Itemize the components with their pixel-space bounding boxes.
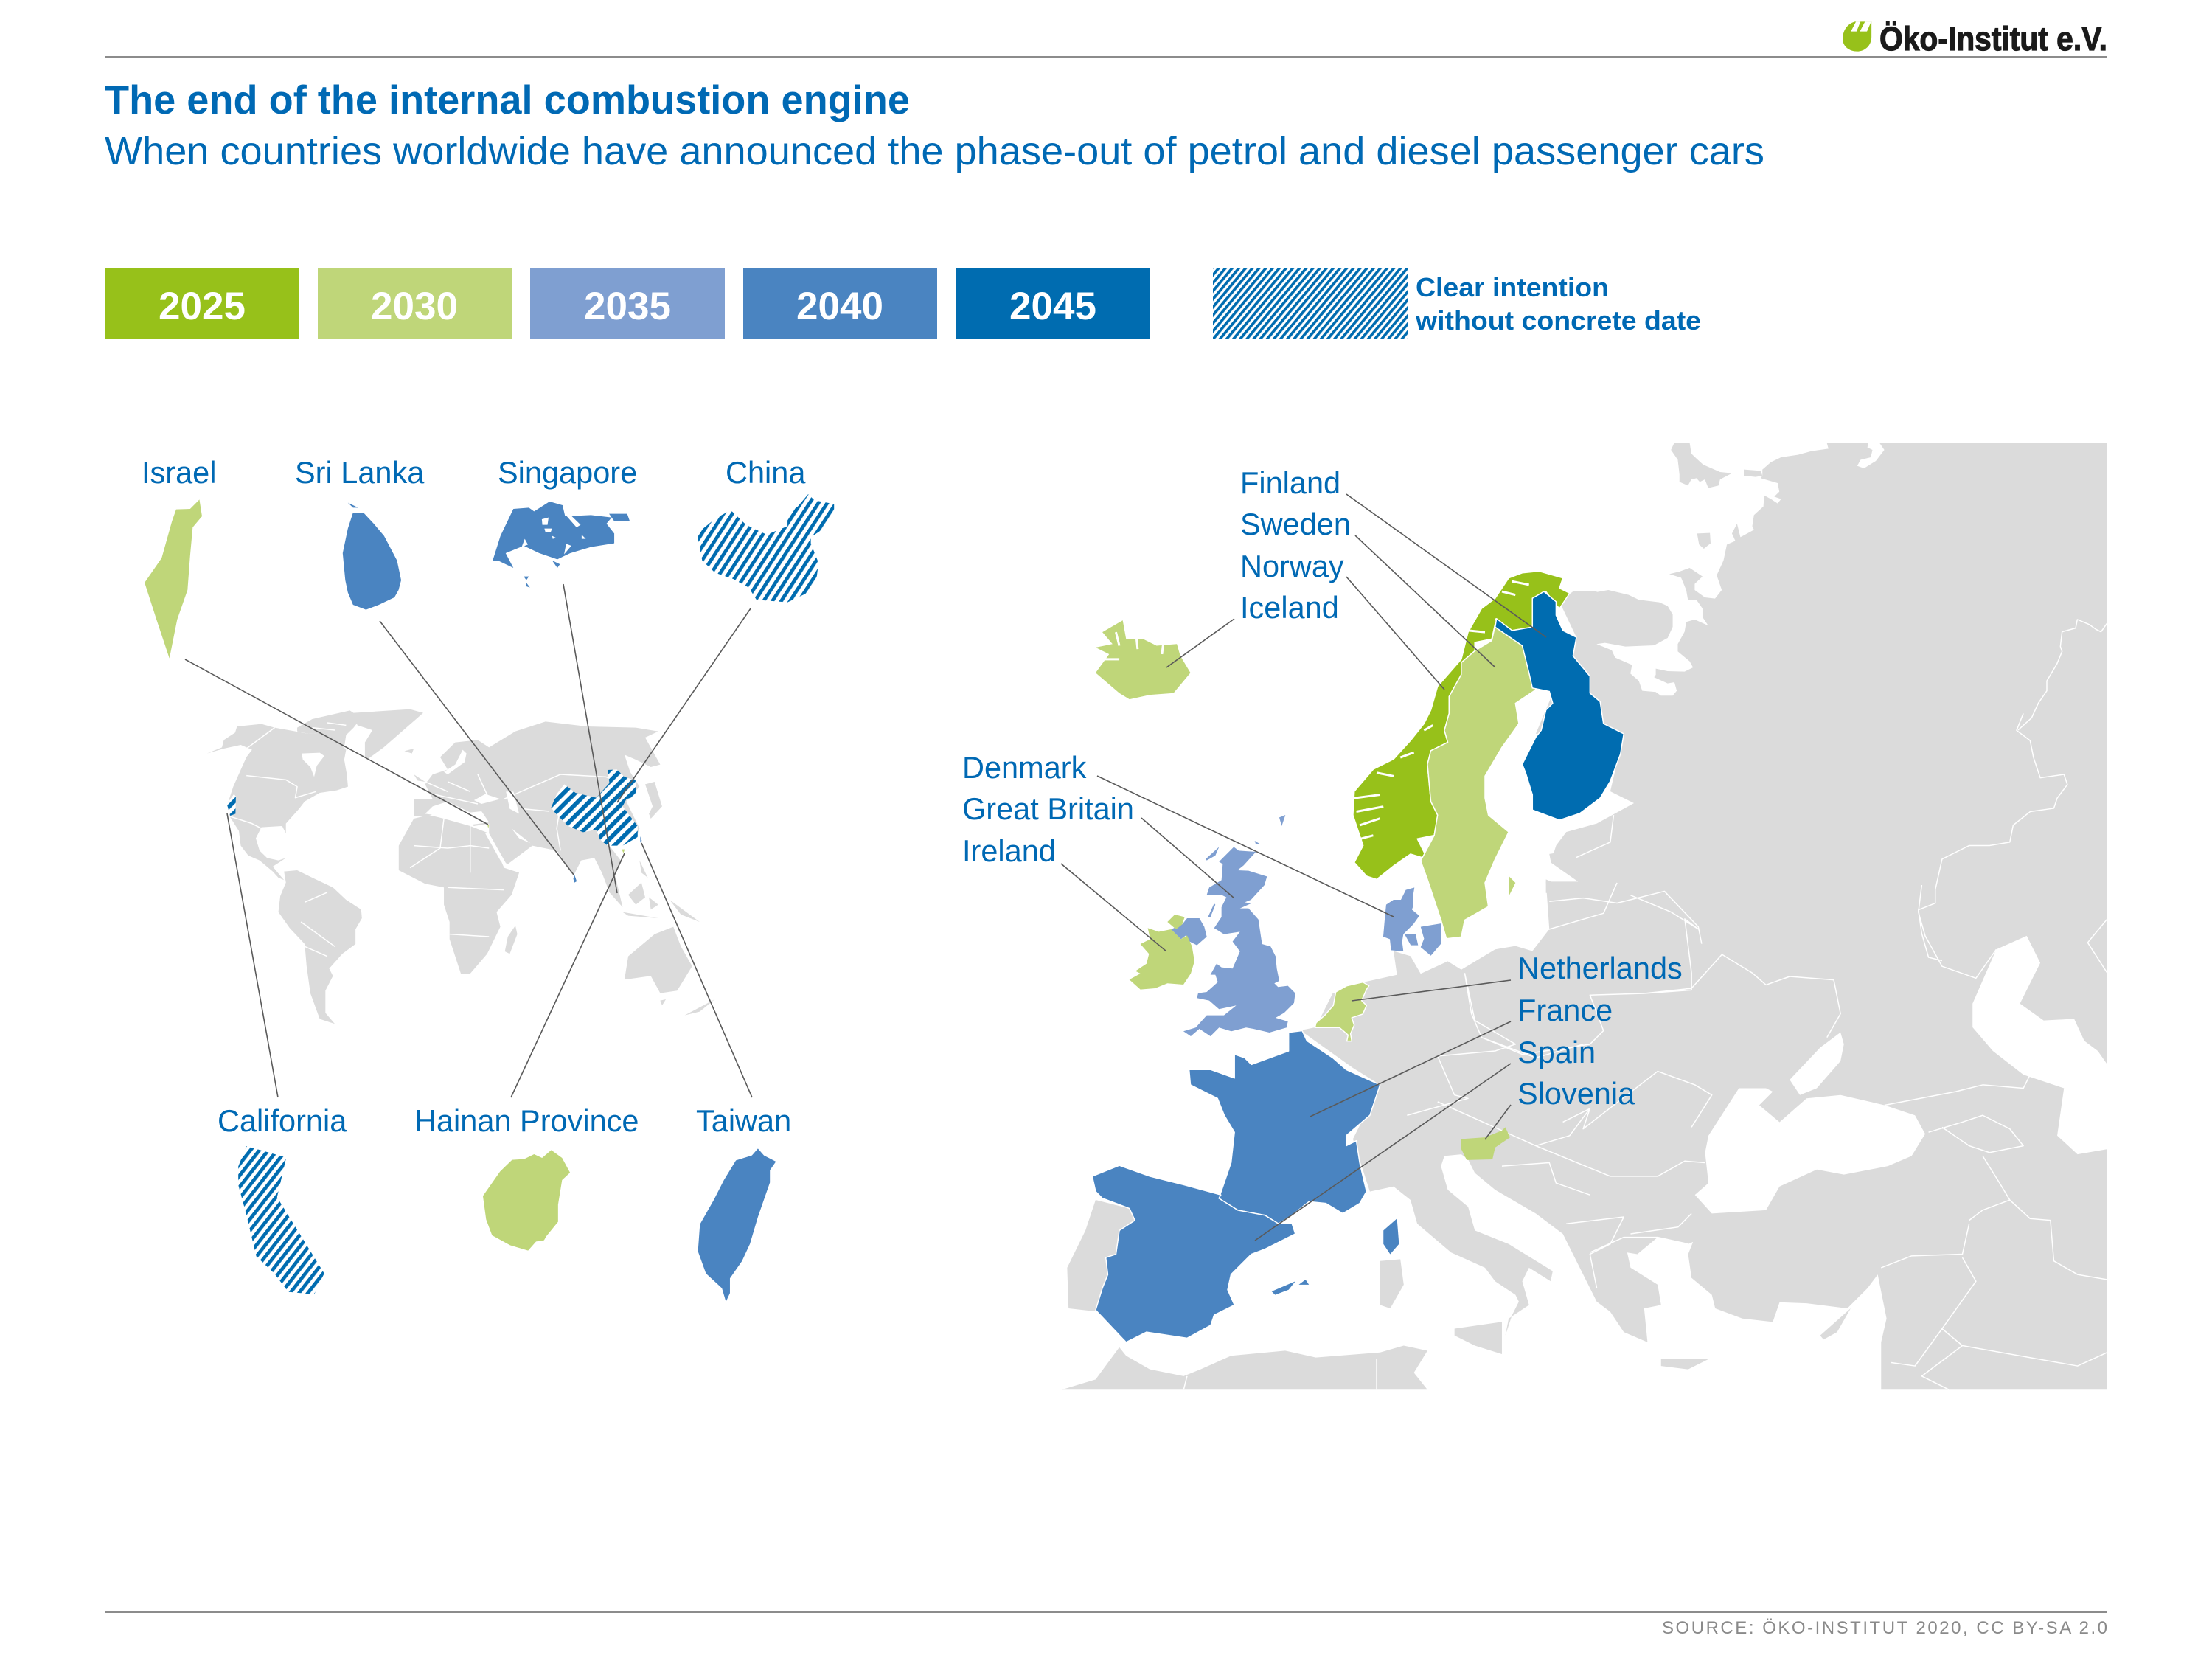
legend: hatch label: Clear intention xyxy=(1416,272,1609,302)
inset: Hainan Province xyxy=(483,1150,570,1251)
Europe: Sweden xyxy=(1421,625,1536,939)
header rule and logo xyxy=(105,20,2107,58)
legend: 2040: 2040 xyxy=(796,285,883,328)
Europe map labels: Finland xyxy=(1240,465,1340,500)
logo wordmark: Öko-Institut e.V. xyxy=(1879,20,2107,58)
world map labels xyxy=(142,455,806,1138)
legend: 2045 xyxy=(956,268,1150,339)
world map labels: Singapore xyxy=(498,455,637,490)
inset: California hatched xyxy=(238,1146,324,1294)
legend: hatch swatch xyxy=(1213,268,1408,339)
inset: China hatched xyxy=(698,494,835,603)
Europe: Netherlands xyxy=(1315,982,1369,1041)
icon: Öko-Institut leaf xyxy=(1843,21,1871,52)
world map labels: Sri Lanka xyxy=(295,455,425,490)
Europe: Slovenia xyxy=(1461,1127,1510,1160)
legend: 2030: 2030 xyxy=(371,285,458,328)
legend: hatch label xyxy=(1415,272,1701,336)
legend xyxy=(105,268,1150,339)
inset: Singapore xyxy=(493,502,630,588)
Europe map labels xyxy=(962,465,1683,1111)
world map xyxy=(207,709,714,1024)
Europe map labels: Sweden xyxy=(1240,507,1351,541)
legend: hatch label: without concrete date xyxy=(1415,305,1701,336)
footer rule xyxy=(105,1611,2107,1613)
inset: Sri Lanka xyxy=(343,503,401,610)
world map labels: China xyxy=(726,455,806,490)
Europe: Norway xyxy=(1353,571,1570,879)
legend: 2035: 2035 xyxy=(584,285,671,328)
Europe map labels: Denmark xyxy=(962,750,1087,785)
inset: Israel xyxy=(145,499,202,659)
legend: 2035 xyxy=(530,268,725,339)
legend: 2040 xyxy=(743,268,937,339)
leader lines xyxy=(185,494,1546,1241)
Europe: France xyxy=(1189,1030,1399,1255)
Europe: Spain xyxy=(1092,1165,1309,1342)
legend: 2025: 2025 xyxy=(159,285,246,328)
subtitle: When countries worldwide have announced the phase-out of petrol and diesel passenger cars xyxy=(105,130,1764,173)
Europe: Great Britain xyxy=(1171,815,1295,1036)
Europe map labels: Iceland xyxy=(1240,590,1339,625)
legend: 2025 xyxy=(105,268,299,339)
Europe: Finland xyxy=(1495,591,1624,820)
world: small highlighted places xyxy=(487,825,641,883)
legend: 2045: 2045 xyxy=(1009,285,1096,328)
Europe map labels: Great Britain xyxy=(962,791,1134,826)
Europe map labels: Slovenia xyxy=(1517,1076,1635,1111)
inset: Taiwan xyxy=(698,1148,776,1302)
Europe: Iceland xyxy=(1096,620,1190,699)
Europe map labels: Netherlands xyxy=(1517,951,1683,985)
source note: SOURCE: ÖKO-INSTITUT 2020, CC BY-SA 2.0 xyxy=(1662,1618,2107,1638)
world map labels: Taiwan xyxy=(696,1103,791,1138)
Europe map labels: France xyxy=(1517,993,1613,1027)
Europe: Ireland xyxy=(1130,915,1194,990)
world map labels: California xyxy=(218,1103,347,1138)
Europe map xyxy=(1062,443,2107,1389)
world: China hatched xyxy=(552,770,638,846)
title: The end of the internal combustion engine xyxy=(105,77,910,122)
world map labels: Hainan Province xyxy=(414,1103,639,1138)
Europe map labels: Norway xyxy=(1240,549,1344,583)
Europe map labels: Ireland xyxy=(962,833,1056,868)
legend: 2030 xyxy=(318,268,512,339)
world map labels: Israel xyxy=(142,455,216,490)
world: California hatched xyxy=(227,794,236,816)
Europe map labels: Spain xyxy=(1517,1035,1596,1069)
Europe: Denmark xyxy=(1383,887,1441,956)
